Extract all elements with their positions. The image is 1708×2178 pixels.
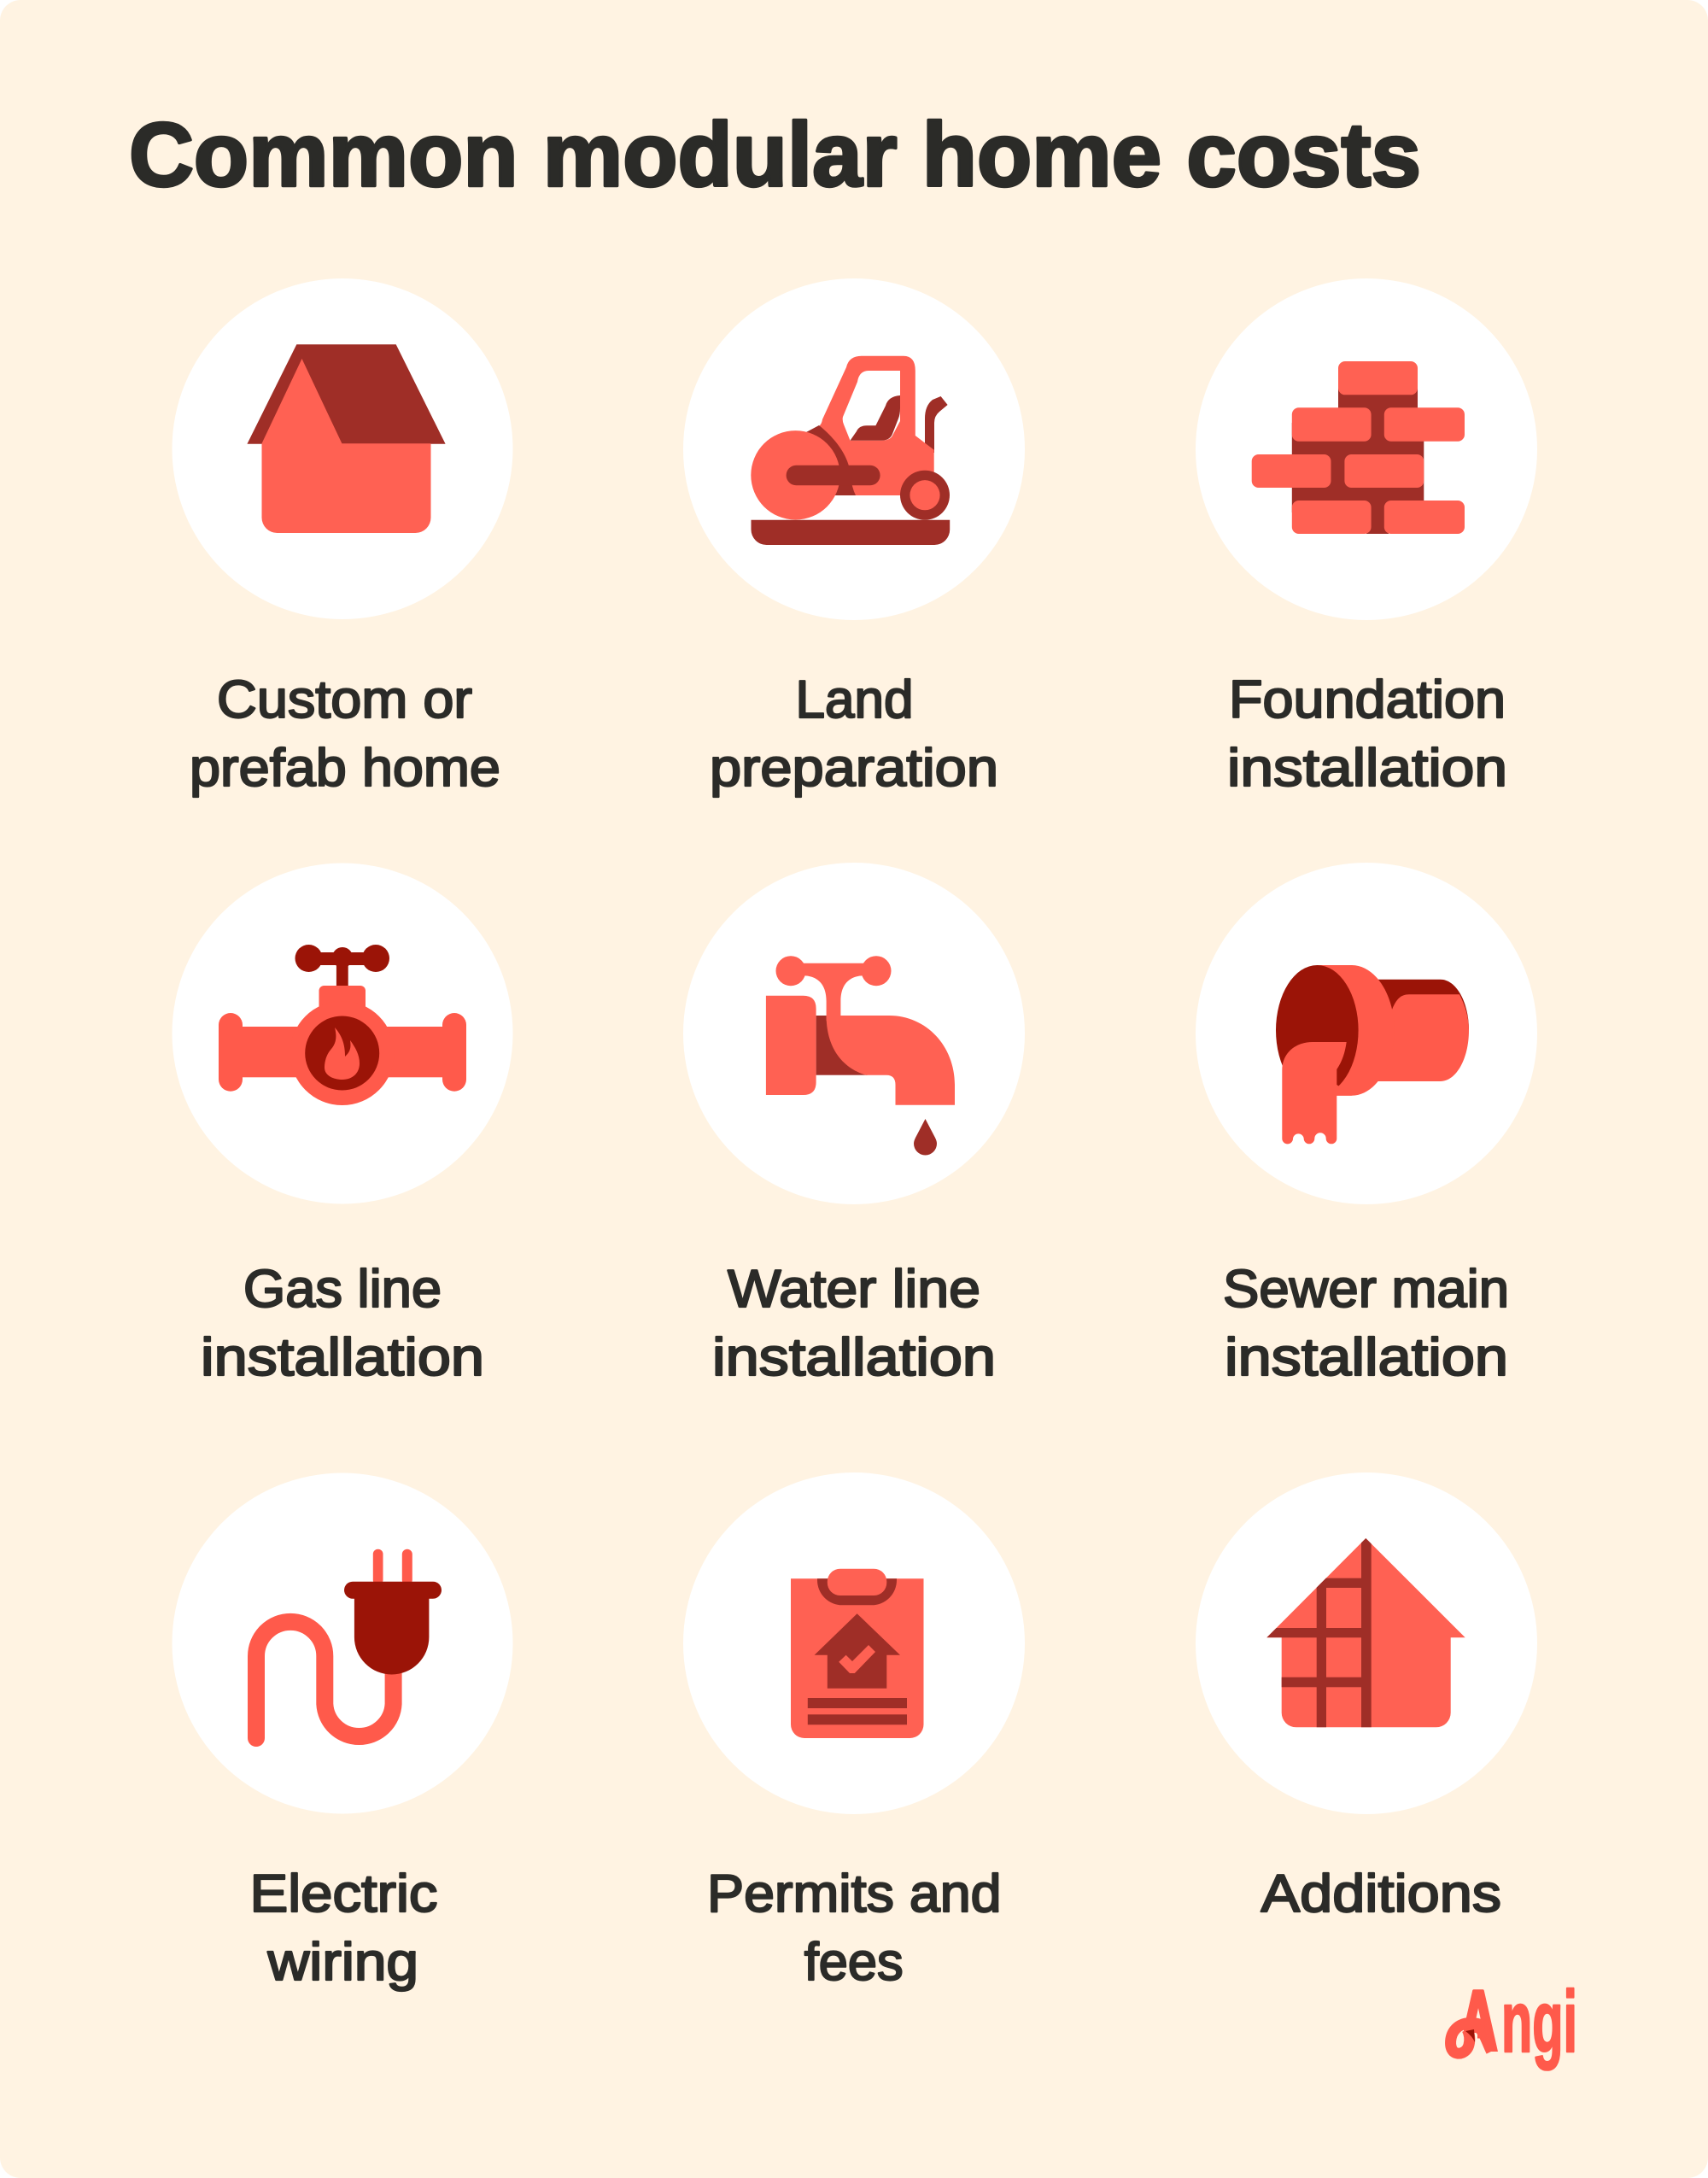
icon: plug and cord	[256, 1549, 442, 1738]
circle: custom home	[173, 278, 512, 619]
panel: sewer main installation	[1196, 863, 1537, 1387]
label: sewer main installation	[1223, 1260, 1509, 1387]
logo: Angi	[1445, 1987, 1575, 2071]
circle: electric wiring	[173, 1472, 512, 1814]
label: water line installation	[712, 1260, 996, 1387]
panel: additions	[1196, 1472, 1537, 1923]
panel: land preparation	[683, 278, 1025, 798]
icon: house	[247, 344, 446, 533]
label: sewer main installation: Sewer main	[1223, 1260, 1509, 1319]
circle: permits and fees	[683, 1472, 1025, 1814]
icon: sewer pipe	[1276, 965, 1469, 1144]
label: sewer main installation: installation	[1225, 1328, 1508, 1387]
panel: water line installation	[683, 863, 1025, 1387]
circle: sewer main	[1196, 863, 1537, 1204]
label: permits and fees: fees	[804, 1933, 904, 1992]
circle: foundation	[1196, 278, 1537, 620]
circle: water line	[683, 863, 1025, 1204]
panel: permits and fees	[683, 1472, 1025, 1992]
logo: Angi: ngi	[1501, 1973, 1577, 2070]
panel: electric wiring	[173, 1472, 512, 1992]
circle: gas line	[173, 863, 512, 1204]
label: foundation installation: Foundation	[1229, 670, 1506, 729]
label: foundation installation	[1227, 670, 1507, 798]
panel: gas line installation	[173, 863, 512, 1387]
label: custom or prefab home	[190, 670, 500, 798]
label: permits and fees	[707, 1865, 1002, 1992]
icon: road roller	[751, 356, 950, 545]
icon: faucet	[766, 956, 955, 1155]
title: Common modular home costs	[129, 104, 1421, 205]
label: land preparation: Land	[796, 670, 914, 729]
icon: brick wall	[1252, 361, 1465, 534]
label: custom or prefab home: prefab home	[190, 739, 500, 798]
label: electric wiring: wiring	[266, 1933, 418, 1992]
icon: gas valve	[219, 945, 466, 1105]
panel: custom or prefab home	[173, 278, 512, 798]
icon: clipboard	[791, 1569, 924, 1738]
label: gas line installation: Gas line	[243, 1260, 442, 1319]
label: water line installation: Water line	[728, 1260, 980, 1319]
label: gas line installation	[201, 1260, 484, 1387]
panel: foundation installation	[1196, 278, 1537, 798]
circle: land preparation	[683, 278, 1025, 620]
label: land preparation: preparation	[710, 739, 998, 798]
icon: house addition	[1264, 1533, 1465, 1732]
label: custom or prefab home: Custom or	[217, 670, 472, 729]
label: foundation installation: installation	[1227, 739, 1507, 798]
circle: additions	[1196, 1472, 1537, 1814]
label: electric wiring	[249, 1865, 437, 1992]
label: water line installation: installation	[712, 1328, 996, 1387]
label: gas line installation: installation	[201, 1328, 484, 1387]
label: electric wiring: Electric	[249, 1865, 437, 1923]
logo: Angi: A	[1459, 1973, 1498, 2070]
label: additions: Additions	[1261, 1865, 1501, 1923]
label: permits and fees: Permits and	[707, 1865, 1002, 1923]
label: land preparation	[710, 670, 998, 798]
